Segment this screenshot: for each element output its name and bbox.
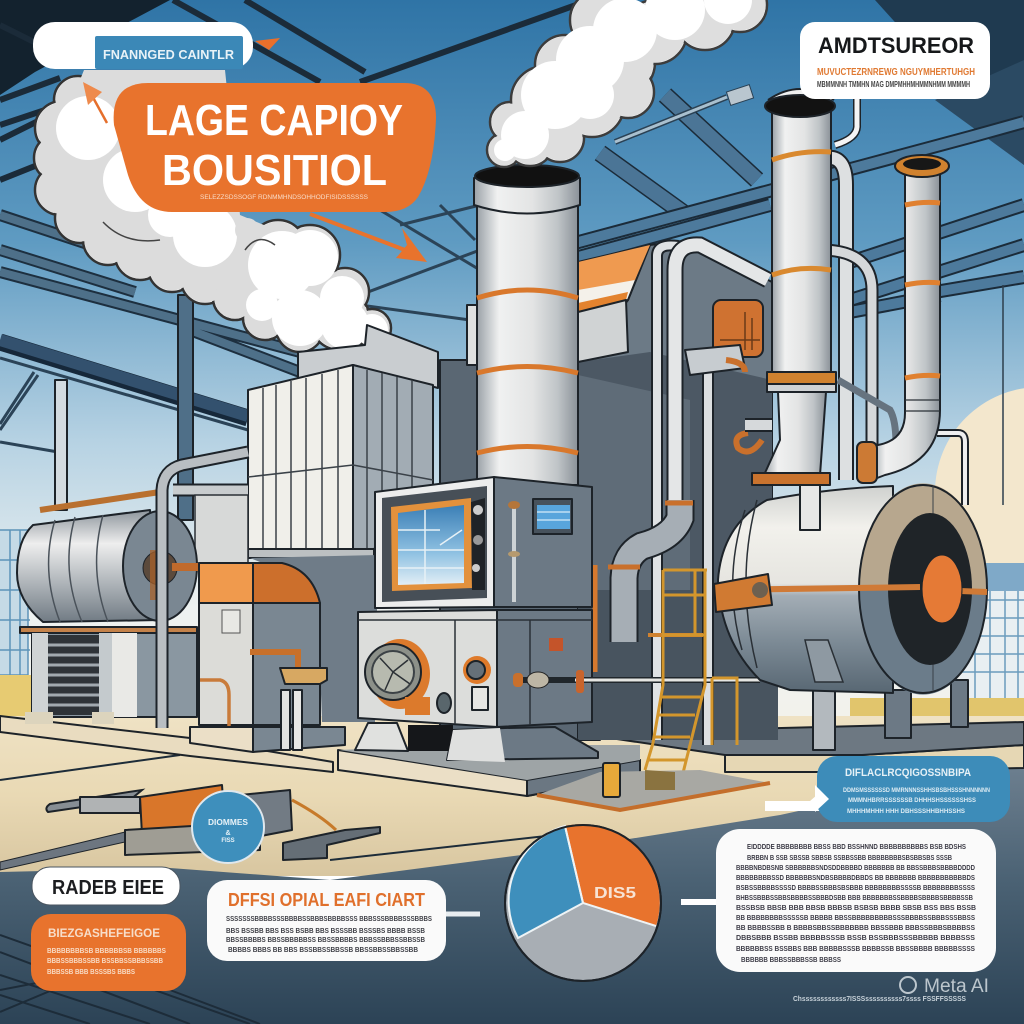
large text panel: BSSBSB BBSB BBB BBSB BBBSB BSBSB BBBB SBSB BSS BBS BSSB xyxy=(736,905,976,912)
support hopper xyxy=(250,555,378,722)
orange topped unit xyxy=(190,563,345,752)
watermark: Meta AI xyxy=(924,976,989,997)
white name pill: RADEB EIEE xyxy=(52,877,164,899)
tank coupling xyxy=(143,550,200,600)
large text panel: BBBBNBDBSNB SBBBBBBSNDSDDBBBBD BBBBBBB BB BBSSBBBSBBBBDDDD xyxy=(736,865,975,872)
central chimney stack xyxy=(474,165,580,485)
title text: BOUSITIOL xyxy=(162,146,387,195)
large horizontal boiler drum xyxy=(714,483,987,750)
blue circle badge xyxy=(192,791,264,863)
white name pill xyxy=(32,867,180,905)
yellow post and mat xyxy=(537,763,770,810)
chart text panel: BBBBS BBBS BB BBS BSSBBSSBBSSB BBSSBBSSBBSSBB xyxy=(228,947,418,954)
clamp xyxy=(714,574,772,612)
title subtext: SELEZZSDSSOGF RDNMMHNDSOHHODFISIDSSSSSS xyxy=(200,194,369,201)
status window xyxy=(533,499,572,534)
badge text: & xyxy=(225,830,231,837)
orange info panel: BBBBBBBBSB BBBBBBSB BBBBBBS xyxy=(47,948,166,955)
blue right callout xyxy=(765,756,1010,822)
dial xyxy=(365,639,430,709)
chimney cap xyxy=(475,165,579,187)
ladder xyxy=(645,570,737,773)
large text panel: DBBSBBB BSSBB BBBBBSSSB BSSB BSSBBBSSSBBBBB BBBBSSS xyxy=(736,935,975,942)
large text panel: EIDDDDE BBBBBBBB BBSS BBD BSSHNND BBBBBBBBBBS BSB BDSHS xyxy=(747,844,966,851)
distant fence right xyxy=(960,563,1024,701)
left process pipes xyxy=(40,490,248,563)
valve rod xyxy=(513,670,760,693)
top-right label xyxy=(800,22,990,99)
large text panel xyxy=(681,829,996,972)
large text panel: BSBSSBBBBSSSSD BBBBSSBBBSBSBBB BBBBBBBBSSSSB BBBBBBBBSSSS xyxy=(736,885,975,892)
badge text: DIOMMES xyxy=(208,818,249,827)
chart text panel: DFFSI OPIAL EAFI CIART xyxy=(228,890,425,910)
drum end cap xyxy=(859,483,987,695)
orange info panel xyxy=(31,914,186,991)
chart text panel: BBS BSSBB BBS BSS BSBB BBS BSSSBB BSSSBS BBBB BSSB xyxy=(226,928,425,935)
title panel xyxy=(114,83,436,212)
service pipes xyxy=(595,245,772,745)
title text: LAGE CAPIOY xyxy=(145,96,403,145)
left curb xyxy=(0,716,333,772)
large left smoke cloud xyxy=(34,70,391,352)
top-left label pill xyxy=(33,22,253,69)
watermark: Chssssssssssss7ISSSssssssssss7ssss FSSFFSSSSS xyxy=(793,996,966,1003)
screen xyxy=(398,505,464,585)
blue right callout: DDMSMSSSSSSD MMRNNNSSHHSBSBHSSSHNNNNNN xyxy=(843,787,990,794)
top-right label: MUVUCTEZRNREWG NGUYMHERTUHGH xyxy=(817,67,975,78)
top-right label: AMDTSUREOR xyxy=(818,33,974,58)
top-left label pill: FNANNGED CAINTLR xyxy=(103,47,235,62)
orange collars xyxy=(752,372,836,485)
orange arrow to label xyxy=(83,82,107,123)
large text panel: BB BBBBBBBBSSSSSB BBBBB BBSSBBBBBBBBBSSSBBBBSSBBBSSSBBSS xyxy=(736,915,975,922)
pipe cap xyxy=(765,89,835,117)
chart text panel: SSSSSSSBBBBSSSBBBBSSBBBSBBBBSSS BBBSSSBBBBSSSBBBS xyxy=(226,916,432,923)
blue right callout: MHHHMHHH HHH DBHSSSHHBHHSSHS xyxy=(847,808,966,815)
pie label: DIS5 xyxy=(594,885,636,902)
watermark xyxy=(793,976,989,1003)
orange info panel: BBBSSB BBB BSSSBS BBBS xyxy=(47,969,135,976)
large text panel: BBBBBBBBSSD BBBBBBSNDBSBBBBDBBDS BB BBBBBBB BBBBBBBBBBBDS xyxy=(736,875,975,882)
orange and white cladding xyxy=(578,245,650,362)
orange hub xyxy=(922,555,962,623)
pie chart xyxy=(505,824,661,981)
tall exhaust pipe xyxy=(752,89,896,485)
orange valve box xyxy=(713,300,763,357)
badge text: FISS xyxy=(221,838,235,844)
large text panel: BRBBN B SSB SBSSB SBBSB SSBBSSBB BBBBBBBBSBSBBSBS SSSB xyxy=(747,855,952,862)
machine base slab xyxy=(338,723,640,796)
left horizontal tank xyxy=(17,510,200,724)
large text panel: BBBBBBSS BSSBBS BBB BBBBBSSSB BBBBSSB BBSSBBBB BBBBBSSSS xyxy=(736,946,975,953)
lower cabinet xyxy=(358,610,760,727)
large text panel: BHBSSBBBSSBBSBBBBSSBBBDSBB BBB BBBBBBBSSBBBBSBBBBSBBBBSSB xyxy=(736,895,973,902)
ground xyxy=(0,675,1024,1024)
louvered filter house xyxy=(248,325,438,722)
control machine xyxy=(338,477,760,796)
tank housing xyxy=(25,633,197,724)
stack smoke cloud xyxy=(487,0,767,167)
chart text panel: BBSSBBBBS BBSSBBBBBSS BBSSBBBBS BBBSSBBBSSBBSSB xyxy=(226,937,425,944)
sky background xyxy=(0,0,1024,760)
left ground equipment xyxy=(0,785,380,870)
rear boiler building xyxy=(440,240,778,740)
label tab xyxy=(95,36,243,69)
blue right callout: DIFLACLRCQIGOSSNBIPA xyxy=(845,767,971,779)
orange info panel: BIEZGASHEFEIGOE xyxy=(48,926,160,940)
right platform slab xyxy=(590,722,1024,772)
steel roof frame xyxy=(0,0,1024,520)
orange info panel: BBBSSBBBSSBB BSSBBSSBBBSSBB xyxy=(47,958,163,965)
right exhaust pipe xyxy=(857,155,965,505)
distant fence left xyxy=(0,530,30,675)
monitor cabinet xyxy=(375,477,592,608)
dark floor xyxy=(0,762,1024,1024)
chart text panel xyxy=(207,880,480,961)
left vertical pipe xyxy=(162,452,248,728)
title text xyxy=(145,96,403,195)
badge text xyxy=(208,818,249,844)
blue right callout: MMMNHBRRSSSSSSB DHHHSHSSSSSSHSS xyxy=(848,797,977,804)
large text panel: BB BBBBSSBB B BBBBSBBSSBBBBBBB BBSSBBB BBBSSBBBSBBBBSS xyxy=(736,925,975,932)
large text panel: BBBBBB BBBSSBBBSSB BBBSS xyxy=(741,957,841,964)
pale sun xyxy=(935,387,1024,597)
rod xyxy=(715,587,987,592)
orange arrow to stack xyxy=(310,214,427,262)
orange pointer top xyxy=(255,38,280,50)
